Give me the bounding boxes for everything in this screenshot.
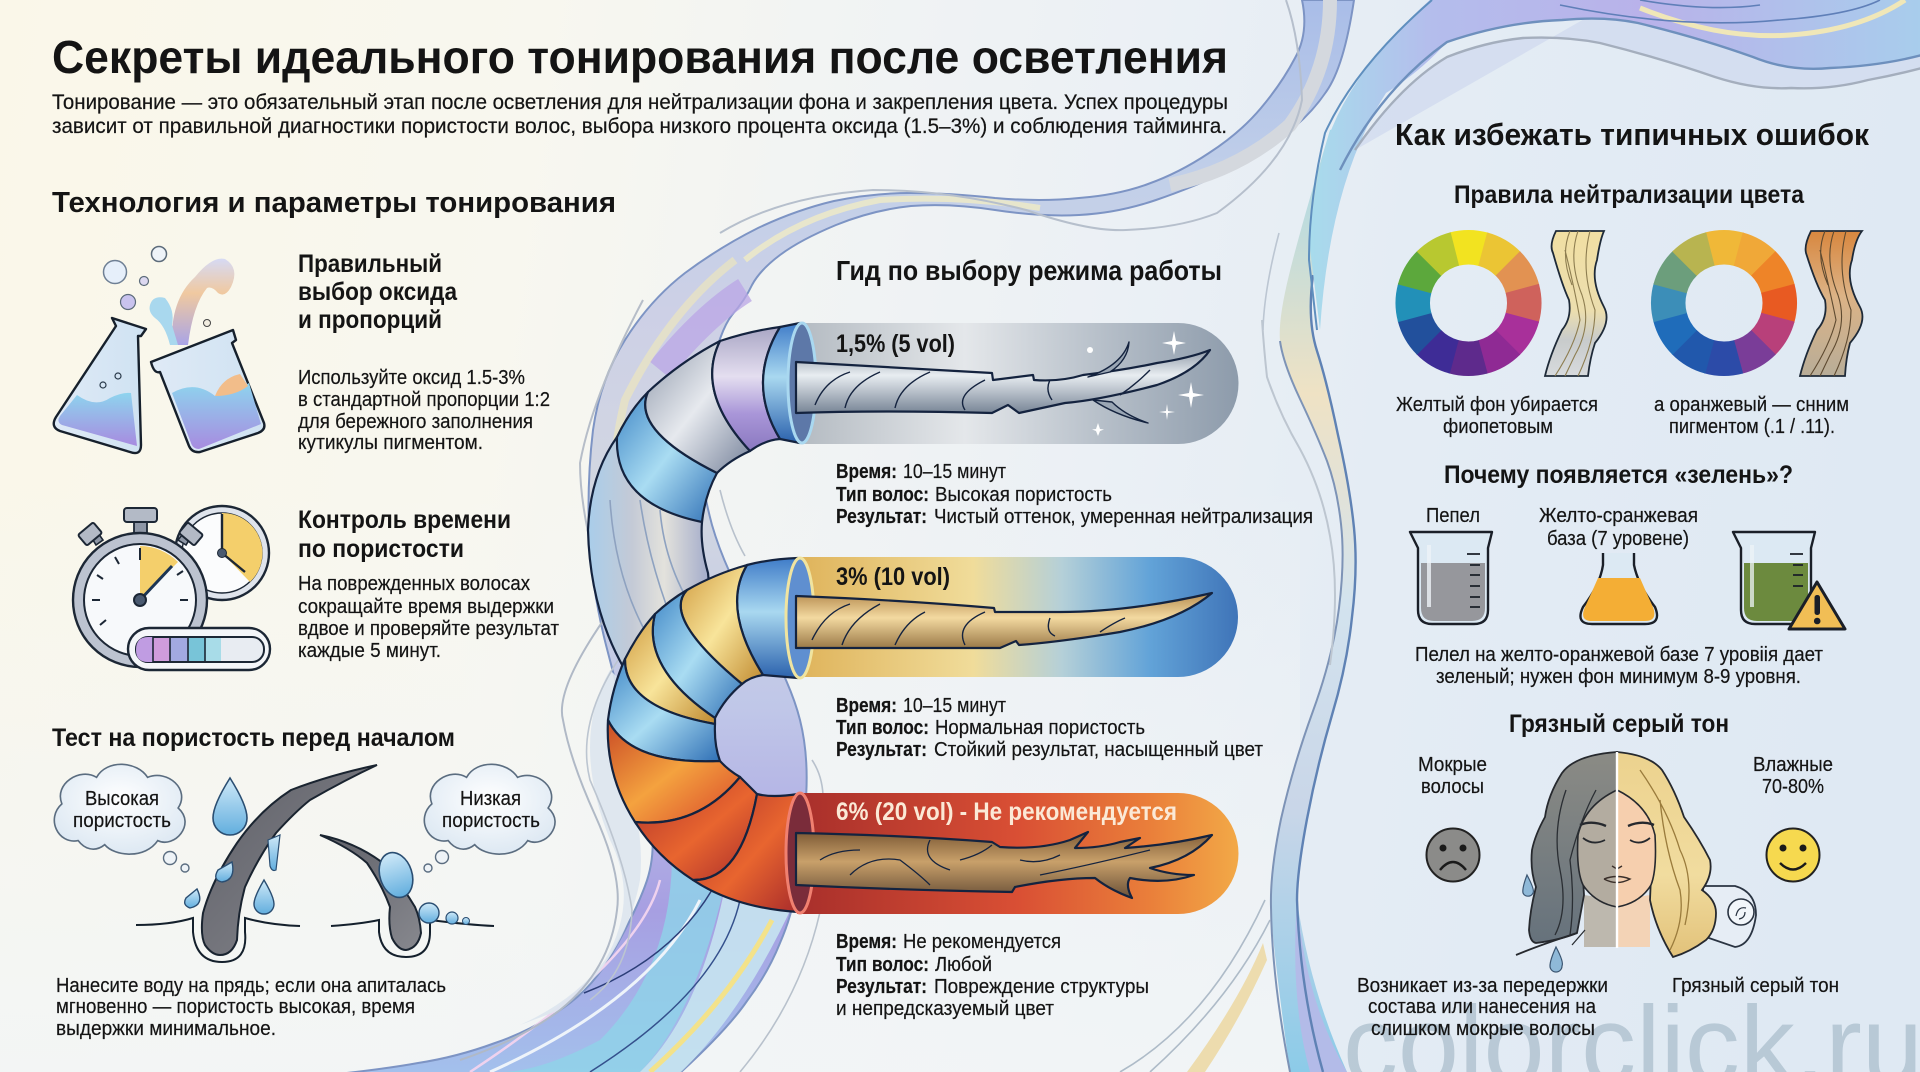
intro paragraph [52,91,1228,138]
heading: mode guide: Гид по выбору режима работы [836,255,1222,286]
intro paragraph: Тонирование — это обязательный этап после осветления для нейтрализации фона и закрепления цвета. Успех процедуры [52,91,1228,114]
label: wet hair: волосы [1421,776,1484,798]
heading: porosity test: Тест на пористость перед началом [52,724,455,752]
text: oxide body: в стандартной пропорции 1:2 [298,389,550,411]
pipe: silver curved tube [588,323,816,670]
heading: neutralization rules: Правила нейтрализации цвета [1454,181,1805,209]
pill: 1.5% tube [797,323,1238,444]
callout: low porosity cloud [424,764,555,872]
icon: blonde strand [1545,231,1607,376]
text: oxide heading: выбор оксида [298,278,458,306]
text: dirty grey result: Грязный серый тон [1672,975,1839,997]
illustration: split face wet versus damp hair [1516,752,1716,972]
text: 6% details [836,931,1149,1020]
text: time body [298,573,559,662]
text: porosity test description [56,975,446,1040]
icon: happy face [1766,828,1820,882]
callout: high porosity cloud: пористость [73,810,171,832]
text: 3% details: Нормальная пористость [935,717,1145,739]
text: 1.5% details [836,461,1313,528]
ribbon: left flowing swoosh [300,0,1354,1072]
pill: 3% tube [797,557,1238,677]
text: 6% details: и непредсказуемый цвет [836,998,1054,1020]
hair: damaged strand [796,832,1212,898]
hair: healthy silver strand [796,342,1210,423]
text: 1.5% details: Время: [836,461,897,483]
text: 1.5% details: Тип волос: [836,484,929,506]
text: dirty grey cause [1357,975,1608,1040]
text: oxide body: кутикулы пигментом. [298,432,483,454]
callout: high porosity cloud [54,764,189,872]
text: green explanation: зеленый; нужен фон минимум 8-9 уровня. [1436,666,1801,688]
text: time heading: Контроль времени [298,506,511,534]
text: time heading: по пористости [298,535,464,563]
text: 3% details: Стойкий результат, насыщенный цвет [934,739,1263,761]
text: time body: сокращайте время выдержки [298,596,554,618]
icon: copper strand [1800,231,1862,376]
text: 6% details: Не рекомендуется [903,931,1061,953]
text: oxide body: для бережного заполнения [298,411,533,433]
text: oxide heading [298,250,458,334]
text: 6% details: Время: [836,931,897,953]
text: yellow caption [1396,394,1598,438]
text: green explanation [1415,644,1823,688]
text: 1.5% details: Высокая пористость [935,484,1112,506]
text: porosity test description: мгновенно — пористость высокая, время [56,996,415,1018]
text: 3% details: Тип волос: [836,717,929,739]
heading: avoid mistakes: Как избежать типичных ошибок [1395,117,1869,152]
text: time heading [298,506,511,563]
icon: hair repelling water [320,835,494,957]
pipe: gold blue and red curved tube [608,558,814,913]
icon: sad face [1426,828,1480,882]
hair: gold strand [796,593,1212,648]
text: oxide heading: Правильный [298,250,442,278]
icon: sparkles [1087,331,1204,436]
icon: warning triangle [1789,582,1845,629]
text: 3% details: 10–15 минут [903,695,1006,717]
text: 6% details: Результат: [836,976,927,998]
text: 6% details: Повреждение структуры [934,976,1149,998]
callout: high porosity cloud: Высокая [85,788,159,810]
heading: dirty grey tone: Грязный серый тон [1509,710,1729,738]
text: 1.5% details: Результат: [836,506,927,528]
text: dirty grey cause: состава или нанесения на [1368,996,1597,1018]
callout: low porosity cloud: Низкая [460,788,521,810]
text: yellow caption: Желтый фон убирается [1396,394,1598,416]
text: 3% details [836,695,1263,761]
icon: stopwatch and clock [73,506,270,670]
heading: why green appears: Почему появляется «зелень»? [1444,461,1793,489]
text: 6% details: Тип волос: [836,954,929,976]
text: porosity test description: Нанесите воду на прядь; если она апиталась [56,975,446,997]
pill label: 1.5%: 1,5% (5 vol) [836,330,955,358]
text: 3% details: Результат: [836,739,927,761]
text: dirty grey cause: слишком мокрые волосы [1371,1018,1595,1040]
text: 1.5% details: 10–15 минут [903,461,1006,483]
text: green explanation: Пелел на желто-оранжевой базе 7 уровiiя дает [1415,644,1823,666]
label: wet hair: Мокрые [1418,754,1487,776]
label: damp hair [1753,754,1833,798]
icon: orange flask [1580,553,1657,624]
pill label: 6%: 6% (20 vol) - Не рекомендуется [836,798,1177,826]
intro paragraph: зависит от правильной диагностики пористости волос, выбора низкого процента оксида (1.5–3%) и соблюдения тайминга. [52,115,1227,138]
label: ash: Пепел [1426,505,1480,527]
text: time body: На поврежденных волосах [298,573,530,595]
icon: green beaker [1733,532,1815,624]
text: orange caption [1654,394,1849,438]
icon: towel roll [1703,886,1756,947]
text: porosity test description: выдержки минимальное. [56,1018,276,1040]
text: 6% details: Любой [935,954,992,976]
label: yellow orange base: база (7 уровене) [1547,528,1689,550]
text: orange caption: пигментом (.1 / .11). [1669,416,1835,438]
label: damp hair: Влажные [1753,754,1833,776]
pill: 6% tube [797,793,1238,914]
heading: technology: Технология и параметры тонирования [52,187,616,219]
text: oxide heading: и пропорций [298,306,442,334]
icon: hair absorbing water [136,765,377,962]
text: dirty grey cause: Возникает из-за передержки [1357,975,1608,997]
ribbon: right flowing swoosh [1120,0,1920,1072]
text: yellow caption: фиопетовым [1443,416,1553,438]
text: orange caption: а оранжевый — снним [1654,394,1849,416]
text: oxide body [298,367,550,454]
text: time body: каждые 5 минут. [298,640,441,662]
title: Секреты идеального тонирования после осветления [52,31,1228,83]
label: yellow orange base [1539,505,1698,550]
label: yellow orange base: Желто-сранжевая [1539,505,1698,527]
chart: colour wheel orange [1645,224,1803,382]
text: time body: вдвое и проверяйте результат [298,618,559,640]
callout: low porosity cloud: пористость [442,810,540,832]
text: 3% details: Время: [836,695,897,717]
text: oxide body: Используйте оксид 1.5-3% [298,367,525,389]
icon: flask and beaker [54,246,264,453]
chart: colour wheel yellow [1390,224,1547,382]
label: wet hair [1418,754,1487,798]
pill label: 3%: 3% (10 vol) [836,563,950,591]
label: damp hair: 70-80% [1762,776,1824,798]
icon: ash beaker [1410,532,1492,624]
text: 1.5% details: Чистый оттенок, умеренная нейтрализация [934,506,1313,528]
